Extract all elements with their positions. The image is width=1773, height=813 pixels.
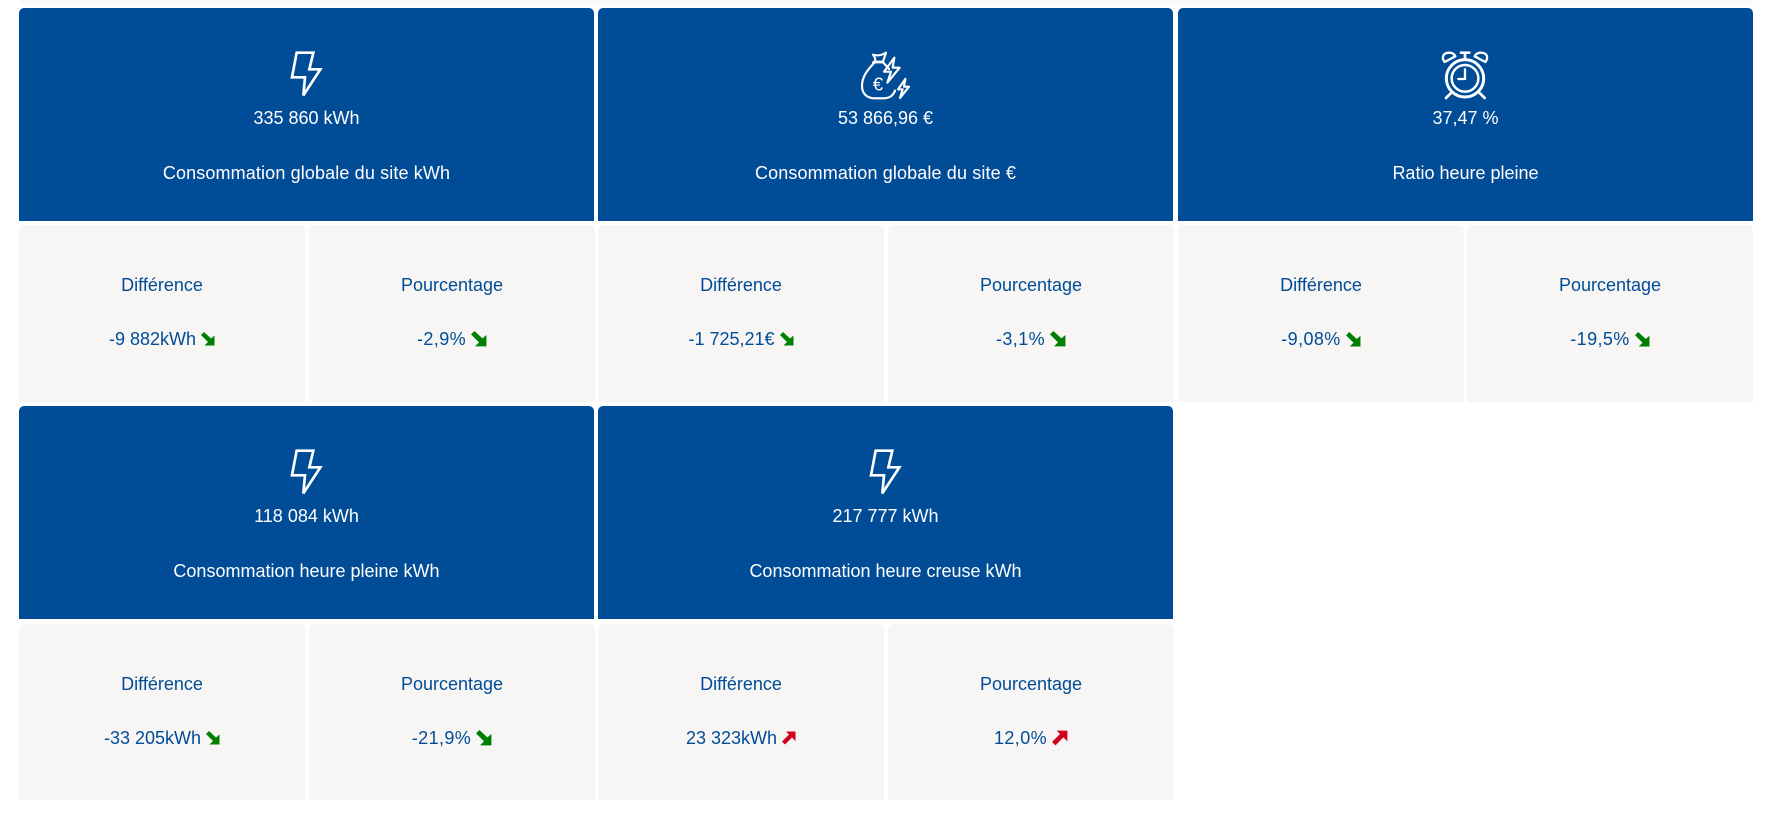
icon: money bag with bolts: € xyxy=(873,74,884,95)
value: 37,47 % xyxy=(1432,108,1499,128)
cell: pourcentage xyxy=(309,624,595,800)
cell: différence xyxy=(19,624,305,800)
value with arrow: -21,9% xyxy=(412,728,471,748)
label: Différence xyxy=(121,275,203,295)
icon: lightning bolt xyxy=(290,449,323,494)
value with arrow: -19,5% xyxy=(1570,329,1630,349)
value: 217 777 kWh xyxy=(832,506,939,526)
label: Différence xyxy=(700,674,782,694)
panel: ratio heure pleine xyxy=(1178,8,1753,402)
panel: consommation heure creuse xyxy=(598,406,1174,800)
label: Consommation heure creuse kWh xyxy=(749,561,1022,581)
value with arrow: -1 725,21€ xyxy=(688,329,775,349)
cell: différence xyxy=(19,225,305,402)
label: Pourcentage xyxy=(401,275,503,295)
cell: pourcentage xyxy=(1467,225,1753,402)
value: 118 084 kWh xyxy=(254,506,359,526)
label: Consommation globale du site € xyxy=(755,163,1016,183)
value with arrow: 23 323kWh xyxy=(686,728,777,748)
label: Ratio heure pleine xyxy=(1392,163,1539,183)
label: Pourcentage xyxy=(980,275,1082,295)
header card xyxy=(598,8,1173,221)
label: Consommation globale du site kWh xyxy=(163,163,450,183)
value with arrow: -9 882kWh xyxy=(109,329,196,349)
header card xyxy=(1178,8,1753,221)
icon: alarm clock xyxy=(1442,51,1488,100)
cell: différence xyxy=(598,225,884,402)
label: Pourcentage xyxy=(1559,275,1661,295)
cell: différence xyxy=(1178,225,1464,402)
label: Différence xyxy=(700,275,782,295)
label: Pourcentage xyxy=(980,674,1082,694)
label: Différence xyxy=(1280,275,1362,295)
value with arrow: -2,9% xyxy=(417,329,466,349)
label: Consommation heure pleine kWh xyxy=(173,561,440,581)
header card xyxy=(19,8,594,221)
panel: consommation globale euros xyxy=(598,8,1174,402)
label: Différence xyxy=(121,674,203,694)
value with arrow: -33 205kWh xyxy=(104,728,201,748)
icon: lightning bolt xyxy=(290,51,323,96)
icon: lightning bolt xyxy=(869,449,902,494)
top faint band xyxy=(19,0,1753,4)
header card xyxy=(598,406,1173,619)
value with arrow: -9,08% xyxy=(1281,329,1341,349)
cell: pourcentage xyxy=(888,624,1174,800)
panel: consommation globale kWh xyxy=(19,8,595,402)
value: 53 866,96 € xyxy=(838,108,933,128)
value: 335 860 kWh xyxy=(253,108,360,128)
icon: money bag with bolts xyxy=(860,52,910,100)
value with arrow: 12,0% xyxy=(994,728,1047,748)
label: Pourcentage xyxy=(401,674,503,694)
value with arrow: -3,1% xyxy=(996,329,1045,349)
cell: pourcentage xyxy=(309,225,595,402)
cell: différence xyxy=(598,624,884,800)
cell: pourcentage xyxy=(888,225,1174,402)
header card xyxy=(19,406,594,619)
panel: consommation heure pleine xyxy=(19,406,595,800)
